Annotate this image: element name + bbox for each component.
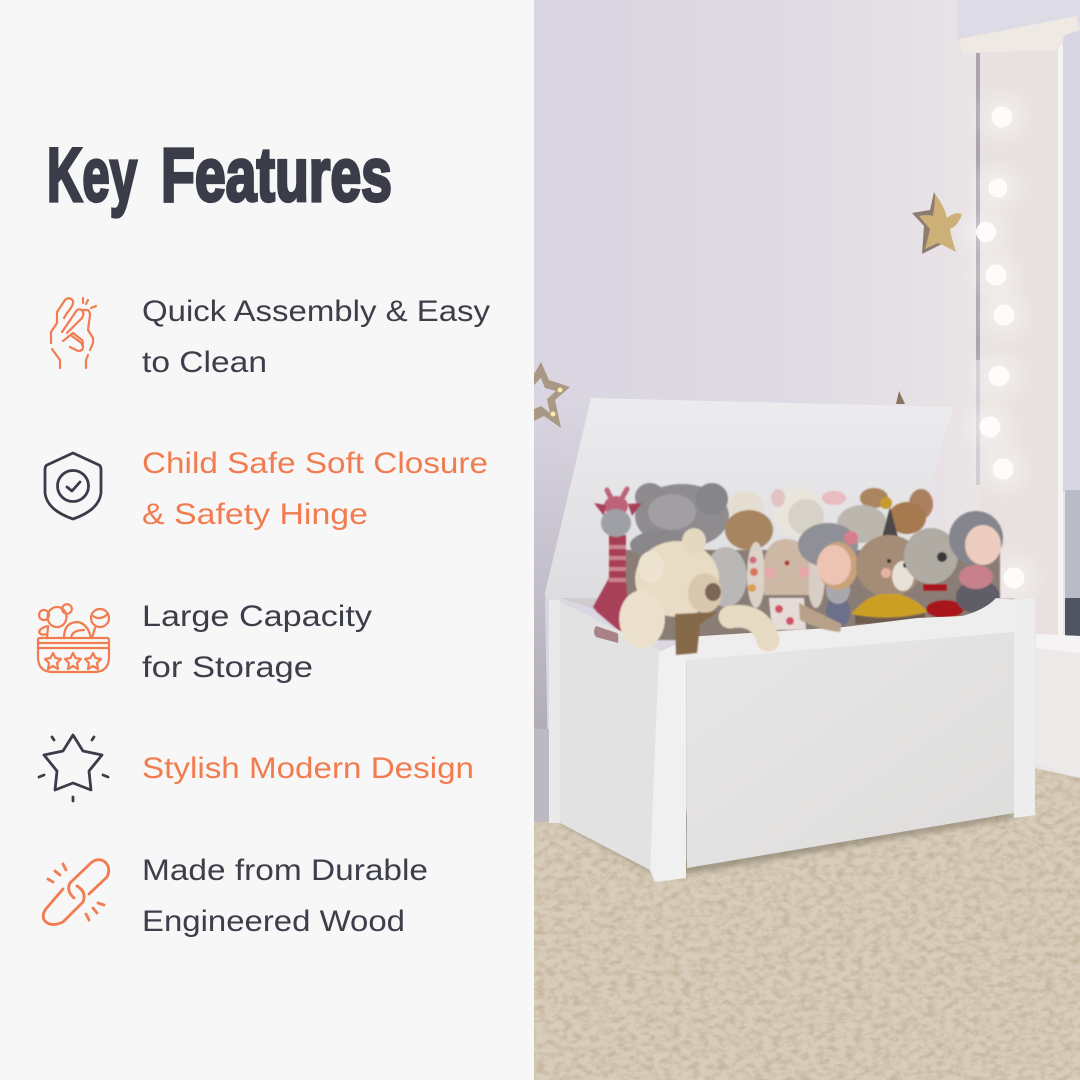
gold star wall decoration [912, 192, 962, 254]
title: Features [161, 133, 392, 218]
soft toys [593, 483, 1003, 640]
brown bear with party hat [851, 497, 928, 624]
bunny doll [747, 539, 825, 630]
small star tip behind lid [896, 391, 905, 404]
lower wall shading [534, 398, 591, 822]
gray back toy behind bunny [705, 547, 747, 607]
baseboard [534, 729, 549, 823]
icon: star with sparkles [39, 735, 108, 801]
front rim with curved cut-out [686, 598, 1015, 662]
feature text: child safe: Child Safe Soft Closure [142, 447, 488, 480]
doll with gray hat [798, 523, 858, 628]
feature text: durable: Engineered Wood [142, 905, 405, 938]
title: Key [47, 133, 137, 218]
light-up star wall decoration [534, 362, 570, 428]
panel: features [0, 0, 534, 1080]
gray hat doll with flowers [949, 511, 1003, 614]
left side panel [560, 602, 660, 870]
knit toy and mouse ears [837, 488, 933, 543]
doll foot [799, 603, 842, 632]
title [47, 133, 392, 218]
bear arm [730, 616, 768, 640]
icon: chain link [43, 860, 109, 924]
feature text: child safe [142, 447, 488, 531]
feature text: quick assembly [142, 295, 490, 379]
wall pillar [959, 16, 1080, 640]
feature text: durable: Made from Durable [142, 854, 428, 887]
feature text: capacity: Large Capacity [142, 600, 372, 633]
gray bear with red bow [904, 528, 964, 618]
bed linen and mattress [1065, 490, 1080, 636]
panel background [0, 0, 534, 1080]
left post [549, 600, 560, 823]
icon: shield with check [45, 453, 101, 519]
wall background [534, 0, 1080, 830]
white box body [549, 598, 1035, 882]
feature text: stylish: Stylish Modern Design [142, 752, 474, 785]
box interior [560, 598, 1015, 640]
feature text: child safe: & Safety Hinge [142, 498, 368, 531]
open lid [545, 398, 953, 602]
striped tie [675, 612, 718, 655]
hand-hold slot [594, 626, 618, 643]
icon: snapping fingers [51, 298, 96, 368]
toy box [545, 398, 1015, 640]
upper right wall above moulding [957, 0, 1080, 40]
giraffe [593, 489, 642, 640]
carpet shadow under box [560, 812, 1014, 874]
panel: product photo [534, 0, 1080, 1080]
cream toys at the back [725, 487, 846, 550]
front left post [650, 640, 686, 882]
right post [1014, 598, 1035, 818]
carpet [534, 760, 1080, 1080]
feature text: quick assembly: to Clean [142, 346, 267, 379]
feature text: quick assembly: Quick Assembly & Easy [142, 295, 490, 328]
feature text: capacity [142, 600, 372, 684]
icon: toy basket [38, 604, 109, 672]
feature text: durable [142, 854, 428, 938]
string lights [966, 95, 1036, 600]
gray elephant back [630, 483, 729, 560]
cream teddy bear [619, 528, 842, 655]
feature text: capacity: for Storage [142, 651, 313, 684]
front panel [687, 632, 1014, 868]
white side cabinet [1036, 634, 1080, 778]
dark interior between toys [625, 550, 1000, 640]
